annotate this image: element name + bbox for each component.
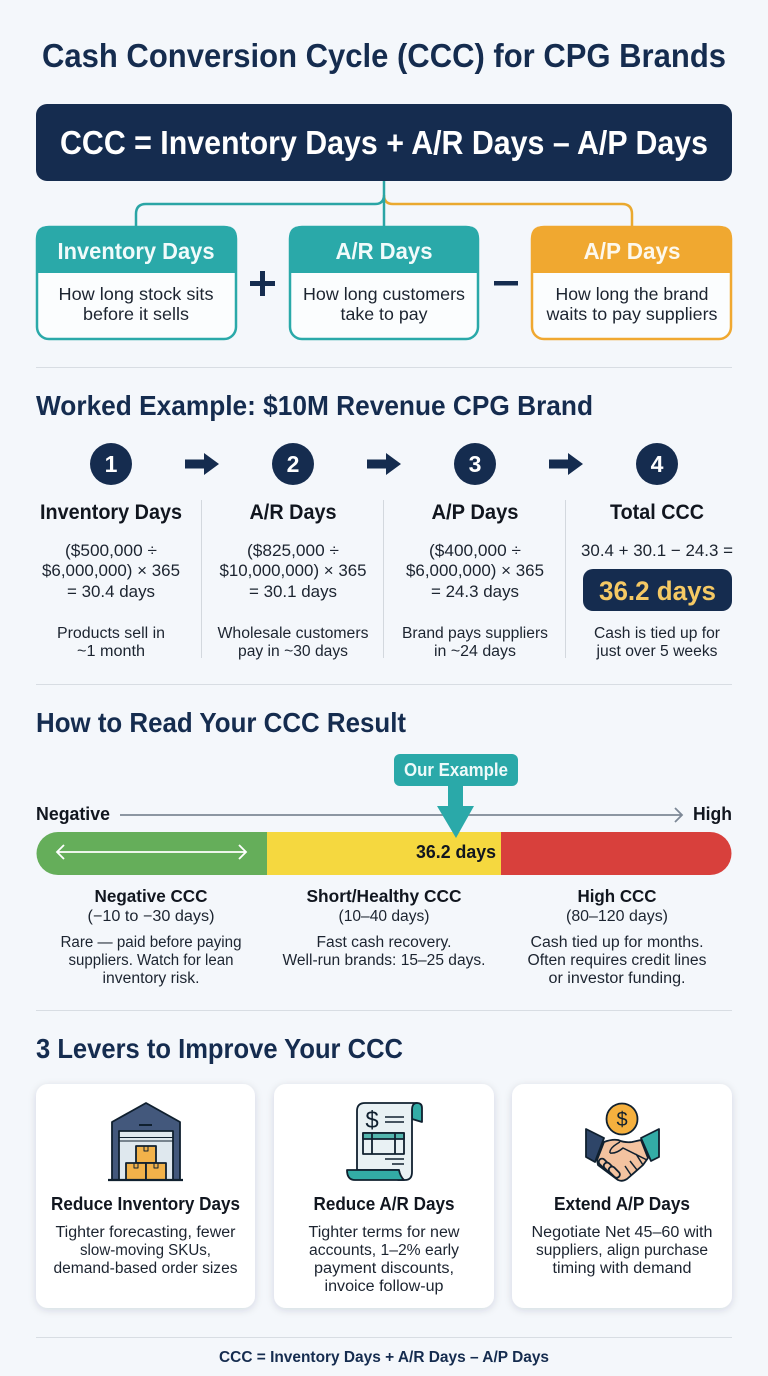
- step 4: Cash is tied up for: [594, 625, 720, 642]
- range: high: High CCC: [578, 886, 657, 906]
- scale bar: [37, 832, 732, 875]
- icon: invoice: [347, 1103, 422, 1180]
- step 1: ~1 month: [77, 643, 145, 660]
- panel: reduce inventory days: Reduce Inventory Days: [51, 1194, 240, 1214]
- panel: A/R days: take to pay: [340, 304, 428, 324]
- panel: A/P days: How long the brand: [556, 284, 708, 304]
- arrow 2 to 3: [367, 453, 401, 475]
- step 3: ($400,000 ÷: [429, 541, 521, 560]
- heading: how to read: How to Read Your CCC Result: [36, 707, 406, 738]
- panel: inventory days: before it sells: [83, 304, 189, 324]
- range: short healthy: Well-run brands: 15–25 days.: [282, 952, 486, 969]
- step 4: [581, 443, 733, 660]
- panel: reduce inventory days: Tighter forecasting, fewer: [56, 1224, 236, 1241]
- panel: inventory days: How long stock sits: [58, 284, 214, 304]
- panel: extend A/P days: [512, 1084, 732, 1308]
- range: short healthy: Fast cash recovery.: [316, 934, 452, 951]
- step 4: Total CCC: [610, 501, 704, 524]
- step 3: in ~24 days: [434, 643, 516, 660]
- heading: levers: 3 Levers to Improve Your CCC: [36, 1033, 403, 1064]
- minus sign: [494, 281, 518, 286]
- step 2: = 30.1 days: [249, 582, 337, 601]
- step 3: = 24.3 days: [431, 582, 519, 601]
- panel: reduce A/R days: invoice follow-up: [324, 1278, 444, 1295]
- range: high: (80–120 days): [566, 908, 668, 925]
- range: short healthy: Short/Healthy CCC: [306, 886, 462, 906]
- range: negative: inventory risk.: [102, 970, 200, 987]
- step 2: $10,000,000) × 365: [220, 561, 366, 580]
- result badge: 36.2 days: [599, 576, 716, 606]
- panel: reduce A/R days: payment discounts,: [314, 1260, 454, 1277]
- panel: A/P days: waits to pay suppliers: [545, 304, 718, 324]
- step 4: just over 5 weeks: [595, 643, 718, 660]
- range: negative: suppliers. Watch for lean: [68, 952, 234, 969]
- range: negative: (−10 to −30 days): [88, 908, 214, 925]
- arrow 1 to 2: [185, 453, 219, 475]
- panel: A/R days: A/R Days: [336, 238, 432, 264]
- panel: inventory days: Inventory Days: [58, 238, 214, 264]
- range: high: Often requires credit lines: [528, 952, 707, 969]
- panel: A/R days: How long customers: [303, 284, 465, 304]
- panel: extend A/P days: suppliers, align purchase: [536, 1242, 708, 1259]
- step 4: 30.4 + 30.1 − 24.3 =: [581, 541, 733, 560]
- scale axis: Negative: [36, 804, 110, 824]
- callout: our example: Our Example: [404, 760, 508, 780]
- range: negative: Negative CCC: [94, 886, 208, 906]
- panel: extend A/P days: timing with demand: [552, 1260, 692, 1277]
- title: Cash Conversion Cycle (CCC) for CPG Brands: [42, 37, 726, 74]
- step 4: 4: [651, 451, 664, 477]
- step 2: pay in ~30 days: [238, 643, 348, 660]
- step 2: [218, 443, 369, 660]
- scale axis: High: [693, 804, 732, 824]
- scale axis: [36, 804, 732, 824]
- callout: our example: [394, 754, 518, 838]
- panel: reduce A/R days: [274, 1084, 494, 1308]
- icon: warehouse: [108, 1103, 183, 1180]
- step 1: [40, 443, 182, 660]
- step 1: $6,000,000) × 365: [42, 561, 180, 580]
- panel: extend A/P days: Extend A/P Days: [554, 1194, 690, 1214]
- step 3: 3: [469, 451, 481, 477]
- footer formula: CCC = Inventory Days + A/R Days – A/P Days: [219, 1349, 549, 1366]
- panel: extend A/P days: Negotiate Net 45–60 with: [532, 1224, 712, 1241]
- step 3: A/P Days: [432, 501, 518, 524]
- icon: invoice: $: [365, 1107, 379, 1134]
- heading: worked example: Worked Example: $10M Revenue CPG Brand: [36, 390, 593, 421]
- panel: A/P days: A/P Days: [584, 238, 680, 264]
- panel: reduce inventory days: [36, 1084, 255, 1308]
- range: short healthy: [282, 886, 486, 969]
- range: high: [528, 886, 707, 987]
- range: short healthy: (10–40 days): [338, 908, 430, 925]
- step 3: Brand pays suppliers: [402, 625, 548, 642]
- step 1: Inventory Days: [40, 501, 182, 524]
- formula banner: [36, 104, 732, 181]
- panel: inventory days: [36, 226, 237, 339]
- panel: reduce A/R days: Reduce A/R Days: [314, 1194, 454, 1214]
- formula banner: CCC = Inventory Days + A/R Days – A/P Days: [60, 124, 708, 161]
- result badge: [583, 569, 732, 611]
- panel: reduce inventory days: demand-based order sizes: [54, 1260, 238, 1277]
- arrow 3 to 4: [549, 453, 583, 475]
- panel: reduce A/R days: accounts, 1–2% early: [309, 1242, 459, 1259]
- step 2: Wholesale customers: [218, 625, 369, 642]
- range: negative: [60, 886, 242, 987]
- step 3: $6,000,000) × 365: [406, 561, 544, 580]
- range: high: or investor funding.: [548, 970, 686, 987]
- step 2: A/R Days: [250, 501, 336, 524]
- panel: reduce A/R days: Tighter terms for new: [308, 1224, 460, 1241]
- step 3: [402, 443, 548, 660]
- panel: A/R days: [289, 226, 479, 339]
- icon: handshake with coin: $: [616, 1109, 628, 1131]
- panel: A/P days: [531, 226, 732, 339]
- connector lines: [136, 181, 632, 226]
- icon: handshake with coin: [586, 1104, 659, 1181]
- scale bar: 36.2 days: [416, 842, 496, 862]
- range: high: Cash tied up for months.: [530, 934, 704, 951]
- panel: reduce inventory days: slow-moving SKUs,: [80, 1242, 211, 1259]
- step 1: 1: [105, 451, 118, 477]
- plus sign: [250, 271, 275, 296]
- step 1: = 30.4 days: [67, 582, 155, 601]
- step 1: Products sell in: [57, 625, 165, 642]
- range: negative: Rare — paid before paying: [60, 934, 242, 951]
- step 2: 2: [287, 451, 299, 477]
- step 1: ($500,000 ÷: [65, 541, 157, 560]
- step 2: ($825,000 ÷: [247, 541, 339, 560]
